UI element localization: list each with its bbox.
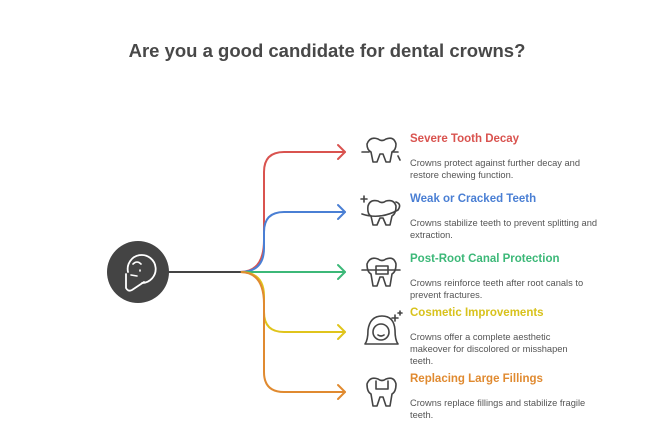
text: Crowns offer a complete aesthetic makeover for discolored or misshapen teeth. xyxy=(410,332,568,366)
text: Weak or Cracked Teeth xyxy=(410,193,536,205)
item 1 xyxy=(410,133,580,180)
text: Crowns stabilize teeth to prevent splitting and extraction. xyxy=(410,218,597,240)
item 2 xyxy=(410,193,597,240)
item 3 xyxy=(410,253,583,300)
icon: decay tooth xyxy=(362,138,400,162)
icon: filled tooth xyxy=(367,378,396,406)
text: Replacing Large Fillings xyxy=(410,373,543,385)
icon: cracked tooth xyxy=(361,196,400,225)
text: Crowns protect against further decay and restore chewing function. xyxy=(410,158,580,180)
item 5 xyxy=(410,373,585,420)
title: Are you a good candidate for dental crowns? xyxy=(129,40,525,61)
text: Post-Root Canal Protection xyxy=(410,253,560,265)
icon: braces tooth xyxy=(362,258,400,286)
branch: orange xyxy=(240,272,345,399)
branch: red xyxy=(240,145,345,272)
connector xyxy=(169,271,240,273)
text: Cosmetic Improvements xyxy=(410,307,544,319)
item 4 xyxy=(410,307,568,366)
text: Crowns replace fillings and stabilize fragile teeth. xyxy=(410,398,585,420)
text: Severe Tooth Decay xyxy=(410,133,519,145)
branch: green xyxy=(240,265,345,279)
text: Crowns reinforce teeth after root canals to prevent fractures. xyxy=(410,278,583,300)
branch: yellow xyxy=(240,272,345,339)
branch: blue xyxy=(240,205,345,272)
icon: thinking face xyxy=(107,241,169,303)
icon: woman smile xyxy=(365,311,402,344)
